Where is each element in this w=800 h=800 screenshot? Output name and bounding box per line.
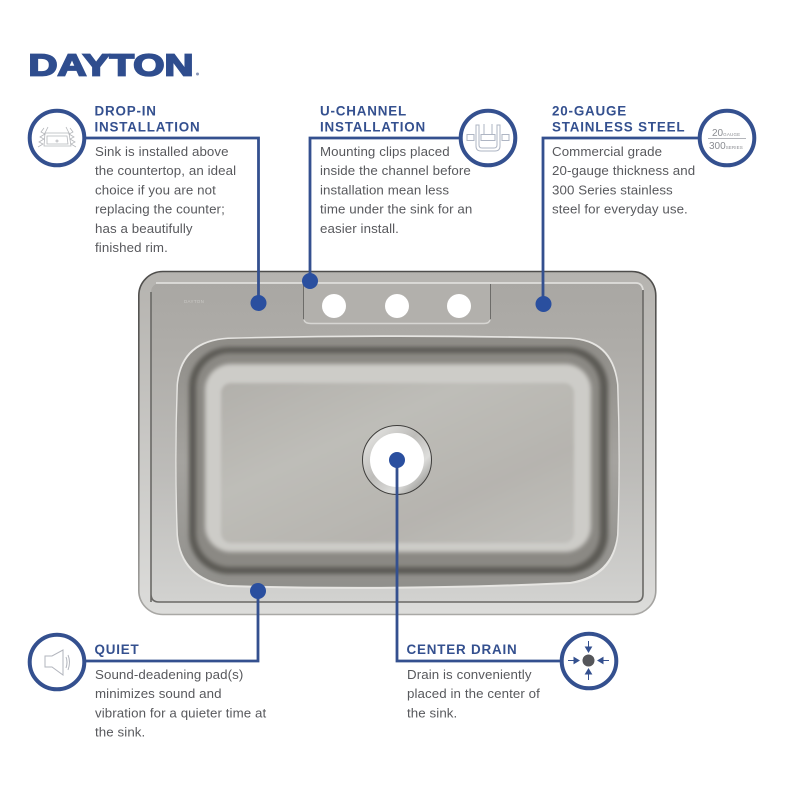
- brand mark on rim: DAYTON: [184, 299, 204, 304]
- icon: 20 gauge 300 series: 20GAUGE: [712, 128, 740, 139]
- body: easier install.: [320, 221, 399, 236]
- body: Sound-deadening pad(s): [95, 667, 243, 682]
- logo: Dayton: DAYTON: [28, 48, 194, 82]
- faucet ledge with three holes: [304, 284, 490, 324]
- connector: 20-gauge: [543, 138, 710, 304]
- feature text: drop-in installation: [94, 104, 236, 255]
- body: installation mean less: [320, 182, 449, 197]
- heading: 20-GAUGE: [552, 104, 627, 118]
- heading: QUIET: [94, 642, 140, 657]
- body: Commercial grade: [552, 144, 662, 159]
- body: the sink.: [95, 725, 145, 740]
- body: choice if you are not: [95, 182, 216, 197]
- connector: center drain: [397, 460, 570, 661]
- heading: DROP-IN: [94, 104, 157, 118]
- icon: speaker: [30, 635, 84, 689]
- body: has a beautifully: [95, 221, 193, 236]
- heading: STAINLESS STEEL: [552, 120, 685, 134]
- feature text: 20-gauge stainless steel: [552, 104, 695, 217]
- feature text: u-channel installation: [320, 104, 472, 236]
- marker dot: drop-in: [250, 295, 266, 311]
- body: steel for everyday use.: [552, 202, 688, 217]
- body: 300 Series stainless: [552, 182, 673, 197]
- body: Sink is installed above: [95, 144, 229, 159]
- body: placed in the center of: [407, 686, 540, 701]
- drain: [362, 426, 432, 494]
- sink outer rim: [139, 272, 656, 614]
- icon: center drain arrows: [562, 634, 616, 688]
- marker dot: center drain: [389, 452, 405, 468]
- marker dot: u-channel: [302, 273, 318, 289]
- icon: drop-in sink: [30, 111, 84, 165]
- heading: CENTER DRAIN: [406, 642, 518, 657]
- body: the sink.: [407, 705, 457, 720]
- marker dot: 20-gauge: [536, 296, 552, 312]
- icon: 20 gauge 300 series: [700, 111, 754, 165]
- body: time under the sink for an: [320, 202, 472, 217]
- heading: INSTALLATION: [94, 120, 201, 134]
- body: finished rim.: [95, 240, 168, 255]
- sink deck: [151, 283, 643, 602]
- body: Mounting clips placed: [320, 144, 450, 159]
- body: 20-gauge thickness and: [552, 163, 695, 178]
- connector: drop-in: [60, 138, 258, 303]
- heading: INSTALLATION: [320, 120, 426, 134]
- body: Drain is conveniently: [407, 667, 532, 682]
- feature text: quiet: [94, 642, 267, 740]
- body: inside the channel before: [320, 163, 471, 178]
- marker dot: quiet: [250, 583, 266, 599]
- bowl: [170, 330, 625, 595]
- heading: U-CHANNEL: [320, 104, 407, 118]
- connector: u-channel: [310, 138, 470, 281]
- body: minimizes sound and: [95, 686, 222, 701]
- feature text: center drain: [406, 642, 540, 720]
- body: the countertop, an ideal: [95, 163, 236, 178]
- connector: quiet: [70, 591, 258, 661]
- icon: 20 gauge 300 series: 300SERIES: [709, 141, 743, 152]
- sink photo: [139, 272, 656, 614]
- icon: u-channel clip: [461, 111, 515, 165]
- body: vibration for a quieter time at: [95, 705, 267, 720]
- body: replacing the counter;: [95, 202, 225, 217]
